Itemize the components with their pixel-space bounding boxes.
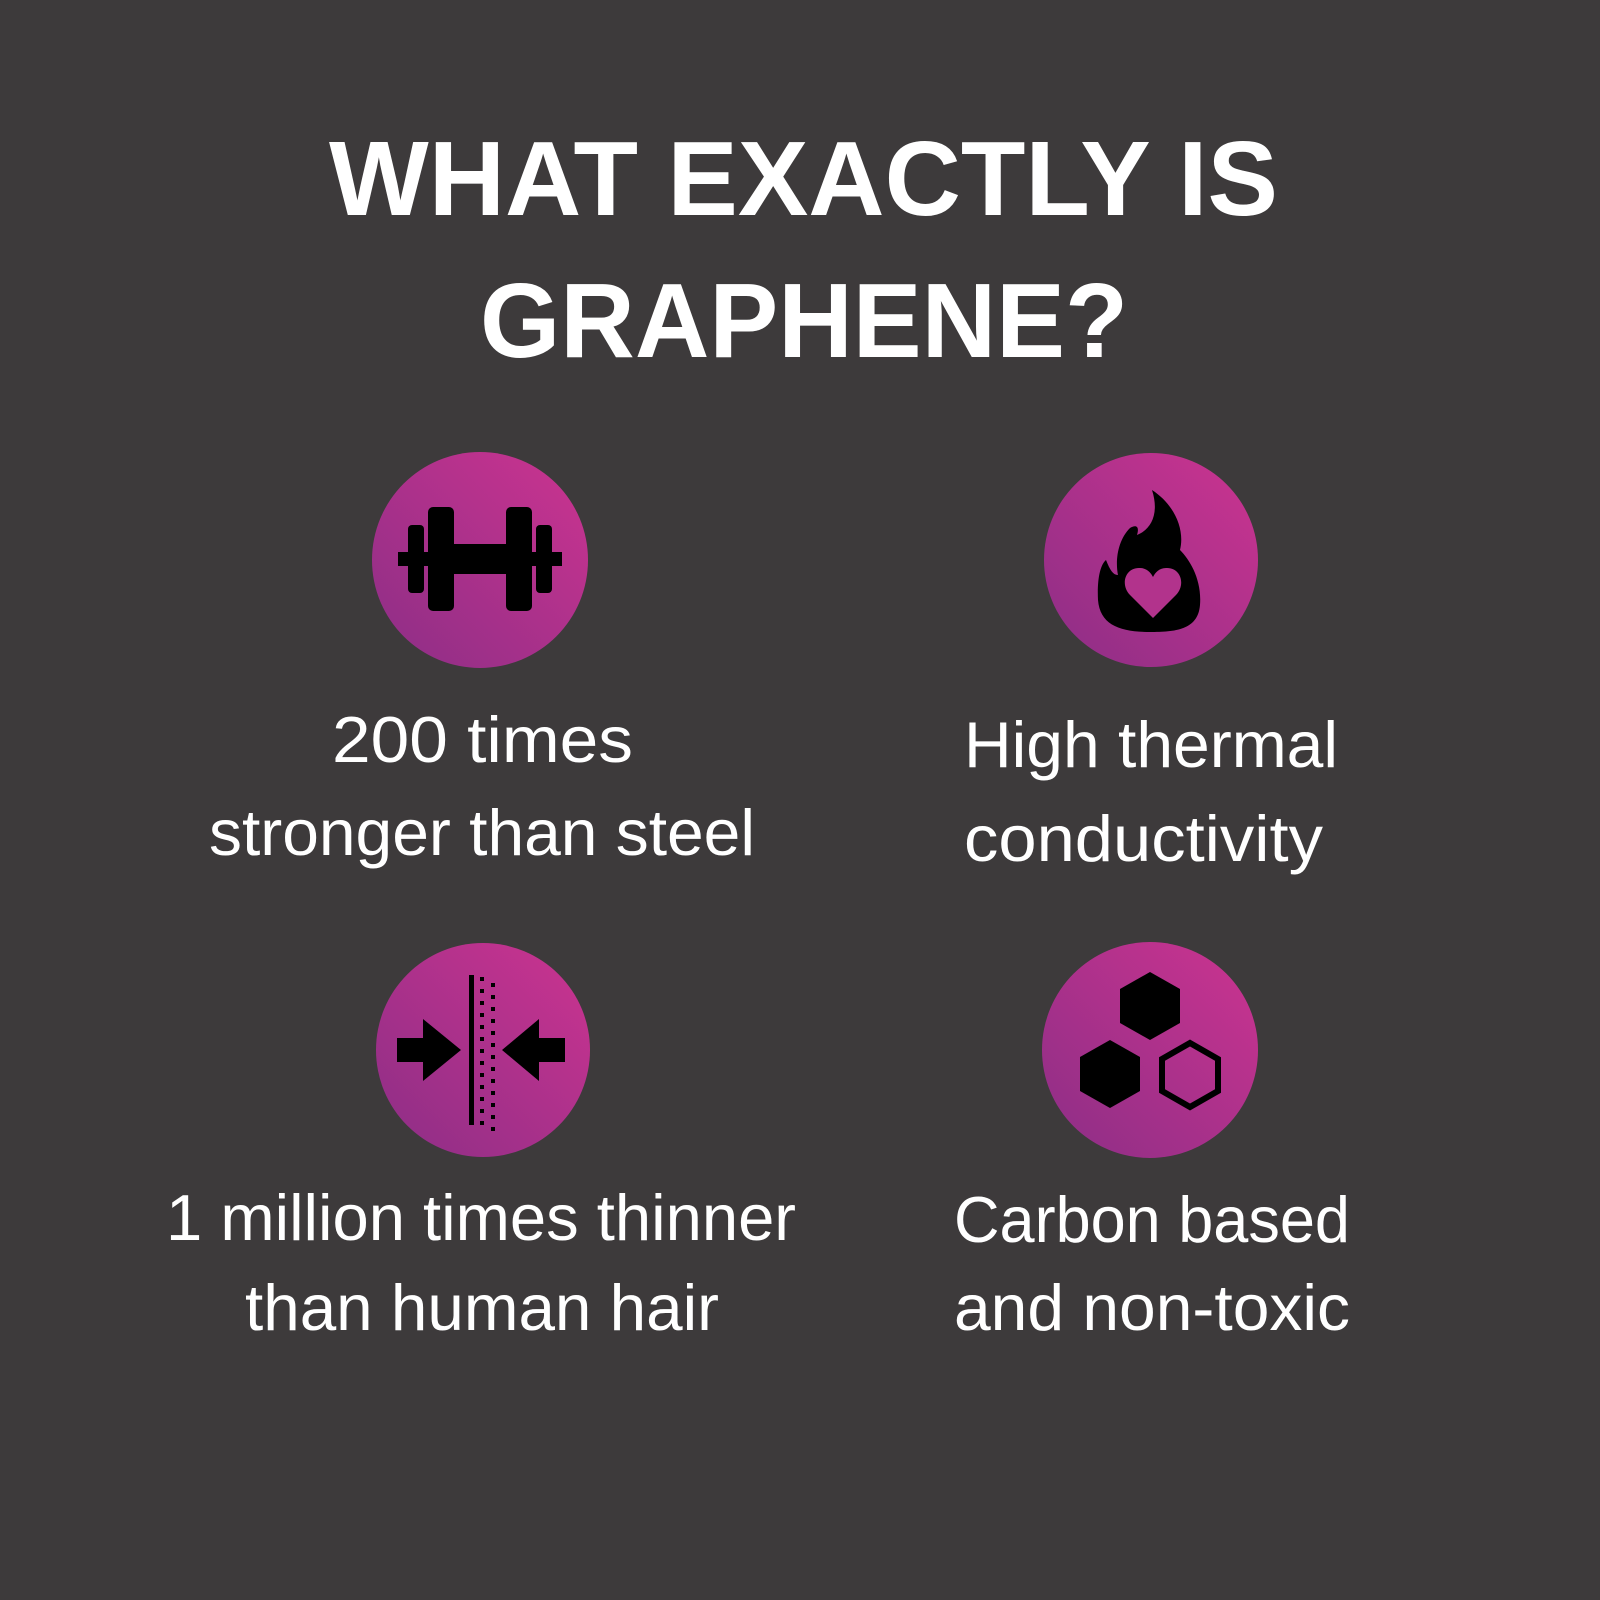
text: Carbon based and non-toxic: Carbon based <box>954 1183 1350 1256</box>
text: Carbon based and non-toxic: and non-toxic <box>954 1271 1350 1344</box>
panel: thermal <box>964 453 1338 875</box>
text: High thermal conductivity: conductivity <box>964 802 1324 875</box>
icon: flame with heart <box>1044 453 1258 667</box>
title: WHAT EXACTLY IS <box>329 120 1278 238</box>
icon: hexagons <box>1042 942 1258 1158</box>
text: 200 times stronger than steel <box>209 703 755 869</box>
text: Carbon based and non-toxic <box>954 1183 1350 1344</box>
panel: carbon <box>954 942 1350 1344</box>
text: High thermal conductivity: High thermal <box>964 708 1338 781</box>
text: 200 times stronger than steel: stronger than steel <box>209 796 755 869</box>
title: GRAPHENE? <box>480 262 1128 380</box>
text: 1 million times thinner than human hair: 1 million times thinner <box>166 1181 796 1254</box>
title <box>329 120 1278 380</box>
panel: strength <box>209 452 755 869</box>
text: 200 times stronger than steel: 200 times <box>332 703 633 776</box>
icon: compression arrows <box>376 943 590 1157</box>
text: 1 million times thinner than human hair: than human hair <box>245 1271 719 1344</box>
text: 1 million times thinner than human hair <box>166 1181 796 1344</box>
panel: thinness <box>166 943 796 1344</box>
icon: dumbbell <box>372 452 588 668</box>
text: High thermal conductivity <box>964 708 1338 875</box>
